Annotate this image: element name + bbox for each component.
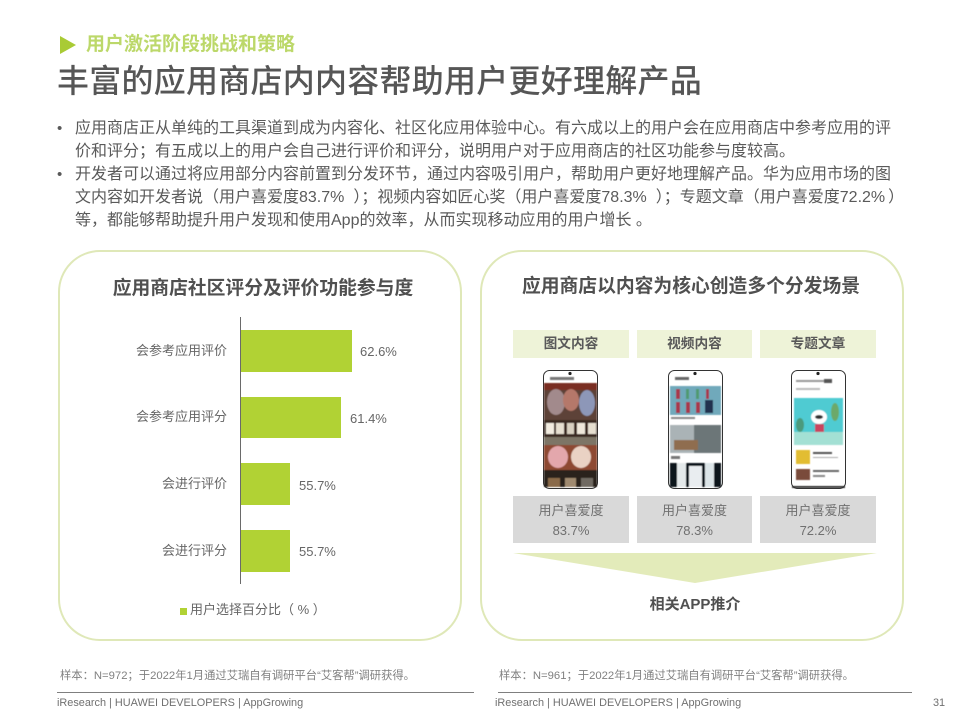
column header 2: 视频内容	[667, 336, 722, 351]
bar 2	[241, 397, 341, 438]
caption: related app recommendation: 相关APP推介	[650, 596, 740, 613]
bar 1	[241, 330, 352, 372]
text block: bullets: •	[57, 120, 62, 137]
text block: bullets: 等，都能够帮助提升用户发现和使用App的效率，从而实现移动应用的用户增长 。	[75, 212, 652, 229]
rating box 1: 83.7%	[553, 523, 589, 538]
value 3: 55.7%	[299, 478, 336, 493]
rating box 3	[760, 496, 876, 543]
phone: feature article	[791, 370, 846, 489]
column header 1: 图文内容	[544, 336, 598, 351]
section label: 用户激活阶段挑战和策略	[86, 34, 295, 55]
bar chart axis	[240, 317, 241, 584]
rating box 2: 用户喜爱度	[662, 503, 727, 518]
rating box 2: 78.3%	[676, 523, 713, 538]
bar label 1: 会参考应用评价	[136, 343, 227, 358]
value 4: 55.7%	[299, 544, 336, 559]
arrow: downward funnel	[514, 553, 876, 583]
panel: community rating participation	[58, 250, 462, 641]
value 2: 61.4%	[350, 411, 387, 426]
footnote right: 样本：N=961；于2022年1月通过艾瑞自有调研平台“艾客帮”调研获得。	[499, 670, 854, 682]
footer source right: iResearch | HUAWEI DEVELOPERS | AppGrowing	[495, 697, 741, 709]
text block: bullets	[57, 119, 904, 229]
column header 1	[513, 330, 629, 358]
rating box 3: 用户喜爱度	[785, 503, 850, 518]
panel: content distribution	[480, 250, 904, 641]
page number: 31	[933, 697, 945, 709]
column header 2	[637, 330, 752, 358]
icon: section triangle	[60, 36, 76, 54]
rating box 1	[513, 496, 629, 543]
rating box 2	[637, 496, 752, 543]
panel heading: left: 应用商店社区评分及评价功能参与度	[113, 277, 413, 298]
text block: bullets: 开发者可以通过将应用部分内容前置到分发环节，通过内容吸引用户，帮助用户更好地理解产品。华为应用市场的图	[75, 166, 891, 183]
phone: image-text content	[543, 370, 598, 489]
column header 3	[760, 330, 876, 358]
rating box 3: 72.2%	[800, 523, 836, 538]
footnote left: 样本：N=972；于2022年1月通过艾瑞自有调研平台“艾客帮”调研获得。	[60, 670, 415, 682]
text block: bullets: 价和评分；有五成以上的用户会自己进行评价和评分，说明用户对于应用商店的社区功能参与度较高。	[75, 143, 795, 160]
title: 丰富的应用商店内内容帮助用户更好理解产品	[57, 63, 702, 99]
bar label 3: 会进行评价	[162, 476, 227, 491]
legend: 用户选择百分比（ % ）	[190, 602, 326, 617]
value 1: 62.6%	[360, 344, 397, 359]
phone: video content	[668, 370, 723, 489]
column header 3: 专题文章	[791, 336, 845, 351]
text block: bullets: 文内容如开发者说（用户喜爱度83.7% ）；视频内容如匠心奖（用户喜爱度78.3% ）；专题文章（用户喜爱度72.2%）	[75, 189, 904, 206]
footer source left: iResearch | HUAWEI DEVELOPERS | AppGrowing	[57, 697, 303, 709]
bar label 2: 会参考应用评分	[136, 409, 227, 424]
rating box 1: 用户喜爱度	[538, 503, 604, 518]
bar 4	[241, 530, 290, 572]
bar 3	[241, 463, 290, 505]
text block: bullets: •	[57, 166, 62, 183]
panel heading: right: 应用商店以内容为核心创造多个分发场景	[522, 275, 860, 296]
bar label 4: 会进行评分	[162, 543, 227, 558]
text block: bullets: 应用商店正从单纯的工具渠道到成为内容化、社区化应用体验中心。有六成以上的用户会在应用商店中参考应用的评	[75, 120, 891, 137]
